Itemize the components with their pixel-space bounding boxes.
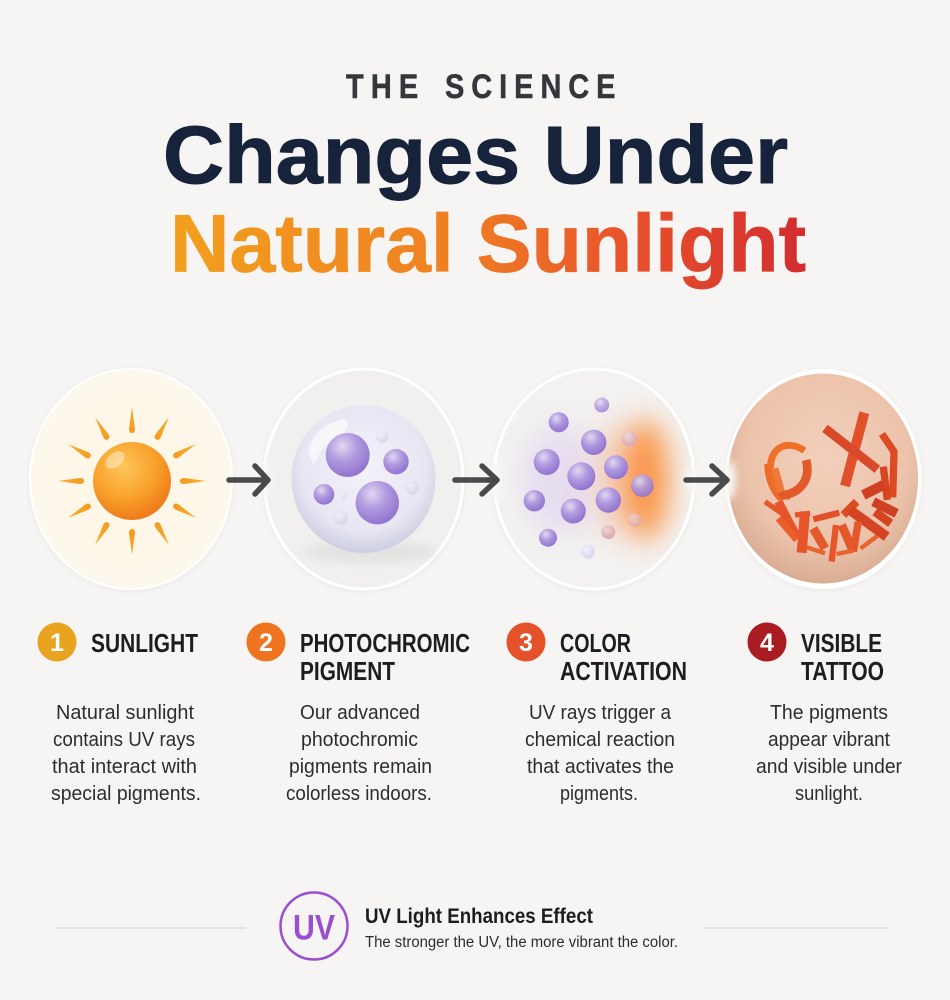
icon: sun rays	[58, 407, 206, 555]
heading: visible tattoo	[801, 628, 884, 686]
description 2	[286, 702, 432, 805]
description 1: that interact with	[52, 756, 197, 778]
arrow 2	[455, 466, 497, 494]
description 3	[525, 702, 675, 805]
description 4: The pigments	[770, 702, 888, 724]
heading: photochromic pigment	[300, 628, 470, 686]
description 3: chemical reaction	[525, 729, 675, 751]
badge 1: 1	[50, 629, 64, 657]
description 4: sunlight.	[795, 783, 863, 805]
description 1: contains UV rays	[53, 729, 195, 751]
step 2: photochromic pigment	[246, 622, 470, 805]
eyebrow heading: THE SCIENCE: SCIENCE	[445, 67, 616, 106]
heading: photochromic pigment: PIGMENT	[300, 656, 395, 686]
illustration: color activation disc	[494, 369, 694, 589]
heading: color activation: ACTIVATION	[560, 656, 687, 686]
callout: UV light enhances effect	[280, 892, 678, 960]
tattoo marks	[765, 413, 897, 562]
arrow 1	[229, 466, 268, 494]
description 4: appear vibrant	[768, 729, 890, 751]
activated spheres	[524, 398, 654, 559]
illustration: pigment bubble disc	[264, 369, 463, 589]
heading: color activation	[560, 628, 687, 686]
heading: color activation: COLOR	[560, 628, 631, 658]
heading: visible tattoo: VISIBLE	[801, 628, 882, 658]
badge 1	[38, 622, 76, 662]
badge 4	[748, 622, 786, 662]
illustration: visible tattoo on skin	[726, 369, 922, 589]
arrow 3	[686, 466, 727, 494]
badge 3	[506, 622, 546, 662]
description 2: photochromic	[301, 729, 418, 751]
description 3: that activates the	[527, 756, 674, 778]
description 2: pigments remain	[289, 756, 432, 778]
purple pigment spheres	[314, 431, 419, 525]
description 2: colorless indoors.	[286, 783, 432, 805]
badge 4: 4	[760, 629, 774, 657]
heading: photochromic pigment: PHOTOCHROMIC	[300, 628, 470, 658]
glass bubble	[292, 405, 436, 553]
icon: UV circle	[280, 892, 348, 960]
description 4	[756, 702, 902, 805]
description 1: special pigments.	[51, 783, 201, 805]
step 3: color activation	[506, 622, 687, 805]
title line: Changes Under: Changes Under	[163, 110, 788, 201]
title line: Natural Sunlight: Natural Sunlight	[170, 198, 806, 290]
badge 2	[246, 622, 286, 662]
heading: sunlight: SUNLIGHT	[91, 628, 198, 658]
badge 3: 3	[519, 629, 533, 657]
description 2: Our advanced	[300, 702, 420, 724]
step 4: visible tattoo	[748, 622, 902, 805]
callout heading: UV Light Enhances Effect	[365, 905, 593, 928]
description 1: Natural sunlight	[56, 702, 194, 724]
orange glow	[522, 420, 669, 540]
icon: sun ball	[93, 442, 171, 520]
description 1	[51, 702, 201, 805]
description 3: UV rays trigger a	[529, 702, 672, 724]
icon: UV circle: UV	[293, 908, 336, 948]
step 1: sunlight	[38, 622, 201, 805]
description 4: and visible under	[756, 756, 902, 778]
eyebrow heading: THE SCIENCE	[346, 67, 616, 106]
illustration: sun disc	[30, 369, 232, 589]
callout text: The stronger the UV, the more vibrant the color.	[365, 934, 678, 951]
heading: visible tattoo: TATTOO	[801, 656, 884, 686]
eyebrow heading: THE SCIENCE: THE	[346, 67, 418, 106]
description 3: pigments.	[560, 783, 638, 805]
badge 2: 2	[259, 629, 273, 657]
